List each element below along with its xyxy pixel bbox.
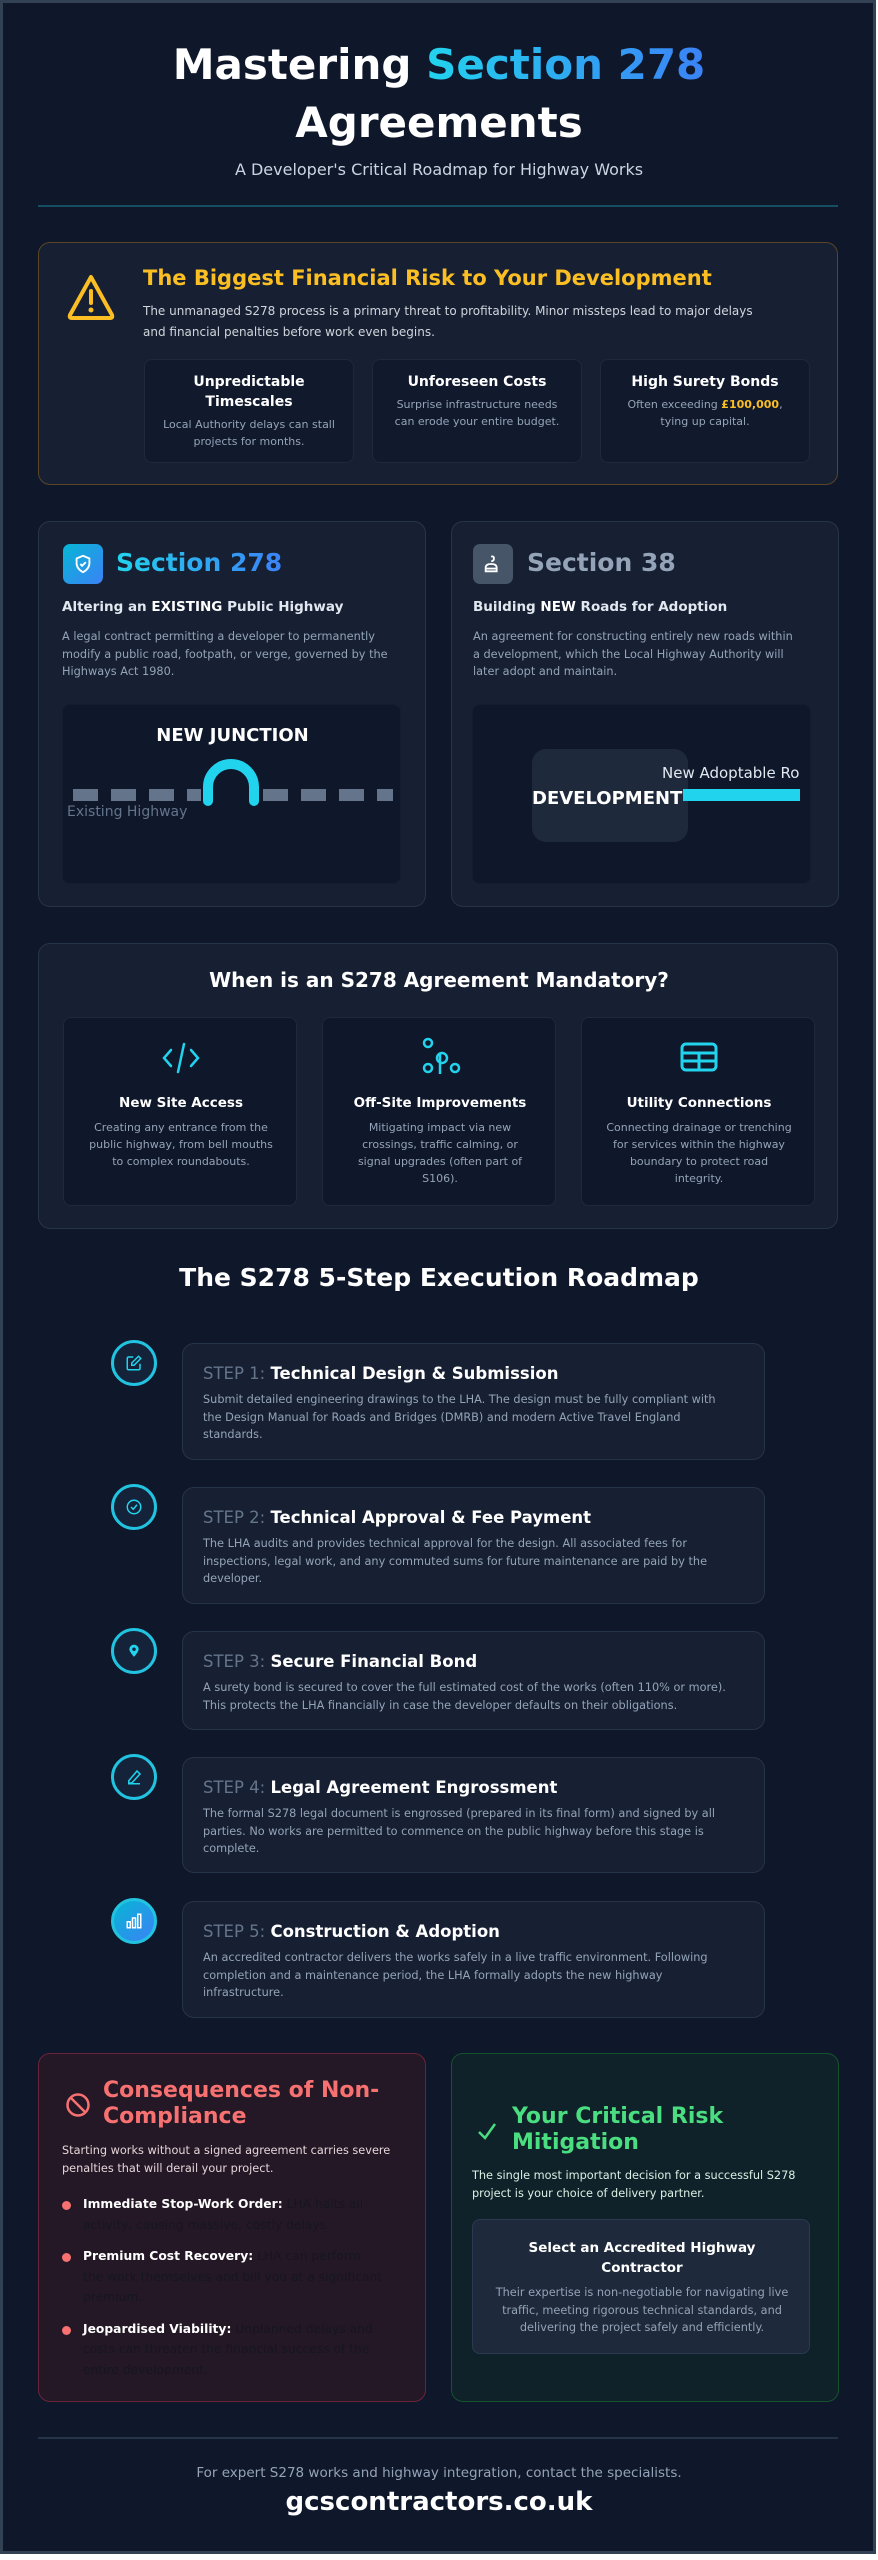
card: bonds: High Surety Bonds bbox=[631, 374, 779, 390]
callout: accredited contractor: Their expertise is non-negotiable for navigating live bbox=[496, 2286, 788, 2299]
text: STEP 1: Technical Design & Submission bbox=[203, 1364, 558, 1383]
title: Mastering Section 278 bbox=[173, 40, 705, 89]
text: standards. bbox=[203, 1428, 263, 1441]
bullet list bbox=[62, 2197, 382, 2376]
text: This protects the LHA financially in case the developer defaults on their obligations. bbox=[203, 1698, 677, 1712]
heading bbox=[512, 2104, 724, 2155]
card: off-site bbox=[322, 1017, 556, 1206]
bullet list: premium. bbox=[83, 2290, 142, 2304]
card: costs: Unforeseen Costs bbox=[408, 374, 546, 390]
bullet list: the work themselves and bill you at a significant bbox=[83, 2270, 382, 2284]
icon: pen bbox=[111, 1754, 157, 1800]
callout: accredited contractor: traffic, meeting rigorous technical standards, and bbox=[502, 2304, 782, 2316]
footer: gcscontractors.co.uk bbox=[286, 2487, 592, 2517]
text: An accredited contractor delivers the works safely in a live traffic environment. Following bbox=[203, 1951, 708, 1964]
card: bonds bbox=[600, 359, 810, 463]
text block: penalties that will derail your project. bbox=[62, 2162, 273, 2174]
text: Submit detailed engineering drawings to the LHA. The design must be fully compliant with bbox=[203, 1393, 716, 1406]
panel: consequences bbox=[38, 2053, 426, 2402]
subheading: Building NEW Roads for Adoption bbox=[473, 599, 727, 615]
card: timescales: Timescales bbox=[205, 394, 293, 410]
text: inspections, legal work, and any commuted sums for future maintenance are paid by the bbox=[203, 1554, 707, 1568]
card: costs: Surprise infrastructure needs bbox=[397, 398, 557, 411]
card: off-site: S106). bbox=[422, 1172, 458, 1185]
heading: Compliance bbox=[103, 2104, 246, 2129]
step 2 bbox=[111, 1484, 765, 1604]
diagram: new junction bbox=[62, 704, 401, 884]
heading: Mitigation bbox=[512, 2130, 639, 2155]
text: infrastructure. bbox=[203, 1986, 284, 1999]
panel: financial risk bbox=[38, 242, 838, 485]
text: the Design Manual for Roads and Bridges (DMRB) and modern Active Travel England bbox=[203, 1410, 681, 1424]
card: utility: integrity. bbox=[675, 1172, 723, 1185]
step 4 bbox=[111, 1754, 765, 1873]
bullet list: activity, causing massive, costly delays. bbox=[83, 2218, 330, 2232]
heading: When is an S278 Agreement Mandatory? bbox=[209, 968, 669, 992]
icon: person bbox=[473, 544, 513, 584]
icon: code bbox=[162, 1042, 200, 1074]
card: site access: to complex roundabouts. bbox=[112, 1155, 250, 1168]
text block: modify a public road, footpath, or verge, governed by the bbox=[62, 648, 388, 660]
heading: Consequences of Non- bbox=[103, 2078, 379, 2103]
card: bonds: Often exceeding £100,000, bbox=[627, 398, 783, 411]
step 5 bbox=[111, 1898, 765, 2018]
bullet list: costs can threaten the financial success of the bbox=[83, 2342, 369, 2356]
subheading: Altering an EXISTING Public Highway bbox=[62, 599, 343, 615]
panel: mitigation bbox=[451, 2053, 839, 2402]
icon: route bbox=[422, 1038, 460, 1074]
title bbox=[173, 40, 705, 147]
text: The LHA audits and provides technical approval for the design. All associated fees for bbox=[203, 1537, 687, 1550]
callout: accredited contractor: Contractor bbox=[601, 2260, 683, 2276]
card: site access: Creating any entrance from the bbox=[94, 1121, 268, 1134]
card: utility: for services within the highway bbox=[613, 1138, 785, 1151]
card: costs bbox=[372, 359, 582, 463]
icon: shield bbox=[63, 544, 103, 584]
bullet list: entire development. bbox=[83, 2362, 208, 2376]
footer bbox=[196, 2465, 682, 2517]
text block: The unmanaged S278 process is a primary threat to profitability. Minor missteps lead to major delays bbox=[143, 304, 753, 318]
heading: Section 38 bbox=[527, 548, 676, 577]
title: Agreements bbox=[295, 98, 583, 147]
text block: A legal contract permitting a developer to permanently bbox=[62, 630, 375, 643]
text block: The single most important decision for a successful S278 bbox=[472, 2169, 795, 2182]
text block bbox=[472, 2169, 795, 2200]
card: timescales: projects for months. bbox=[194, 435, 304, 448]
card: utility: boundary to protect road bbox=[630, 1155, 768, 1168]
panel: section 38 bbox=[451, 521, 839, 907]
heading: Your Critical Risk bbox=[512, 2104, 723, 2129]
text: The formal S278 legal document is engrossed (prepared in its final form) and signed by all bbox=[203, 1807, 715, 1820]
text block: later adopt and maintain. bbox=[473, 665, 617, 678]
diagram: new junction: NEW JUNCTION bbox=[156, 725, 309, 746]
icon: edit bbox=[111, 1340, 157, 1386]
text block bbox=[62, 2144, 390, 2174]
card: timescales: Unpredictable bbox=[193, 374, 305, 390]
text block bbox=[473, 630, 793, 678]
icon: check bbox=[478, 2123, 496, 2140]
heading: The Biggest Financial Risk to Your Development bbox=[143, 266, 712, 290]
card: off-site: signal upgrades (often part of bbox=[358, 1155, 522, 1168]
text: complete. bbox=[203, 1842, 259, 1855]
text: parties. No works are permitted to commence on the public highway before this stage is bbox=[203, 1824, 704, 1838]
diagram: development: DEVELOPMENT bbox=[532, 788, 682, 809]
icon: warning bbox=[68, 274, 114, 320]
card: site access bbox=[63, 1017, 297, 1206]
heading bbox=[103, 2078, 379, 2129]
subtitle: A Developer's Critical Roadmap for Highway Works bbox=[235, 160, 643, 179]
text block bbox=[62, 630, 388, 678]
card: utility: Utility Connections bbox=[627, 1095, 771, 1111]
callout: accredited contractor: Select an Accredited Highway bbox=[529, 2240, 755, 2256]
diagram: development bbox=[472, 704, 811, 884]
text block: project is your choice of delivery partner. bbox=[472, 2186, 704, 2200]
panel: mandatory bbox=[38, 943, 838, 1229]
icon: pin bbox=[111, 1628, 157, 1674]
text: completion and a maintenance period, the LHA formally adopts the new highway bbox=[203, 1968, 662, 1982]
callout: accredited contractor bbox=[472, 2219, 810, 2354]
text: STEP 5: Construction & Adoption bbox=[203, 1922, 500, 1941]
text: STEP 3: Secure Financial Bond bbox=[203, 1652, 477, 1671]
text: A surety bond is secured to cover the full estimated cost of the works (often 110% or more). bbox=[203, 1681, 726, 1694]
card: utility: Connecting drainage or trenching bbox=[606, 1121, 792, 1134]
text: developer. bbox=[203, 1572, 262, 1585]
step 1 bbox=[111, 1340, 765, 1460]
card: off-site: Off-Site Improvements bbox=[354, 1095, 526, 1111]
icon: table bbox=[680, 1042, 718, 1072]
text block: An agreement for constructing entirely new roads within bbox=[473, 630, 793, 643]
diagram: new junction: Existing Highway bbox=[67, 804, 187, 820]
icon: check bbox=[111, 1484, 157, 1530]
card: site access: New Site Access bbox=[119, 1095, 243, 1111]
text block: Highways Act 1980. bbox=[62, 665, 174, 678]
card: site access: public highway, from bell mouths bbox=[89, 1138, 273, 1151]
card: off-site: crossings, traffic calming, or bbox=[362, 1138, 518, 1151]
bullet list: Jeopardised Viability: Unplanned delays and bbox=[83, 2322, 373, 2336]
text block: a development, which the Local Highway Authority will bbox=[473, 648, 784, 660]
text block: Starting works without a signed agreement carries severe bbox=[62, 2144, 390, 2157]
text block: and financial penalties before work even begins. bbox=[143, 325, 435, 339]
text: STEP 2: Technical Approval & Fee Payment bbox=[203, 1508, 591, 1527]
callout: accredited contractor: delivering the project safely and efficiently. bbox=[520, 2321, 764, 2334]
icon: chart bbox=[111, 1898, 157, 1944]
card: costs: can erode your entire budget. bbox=[395, 415, 559, 428]
footer: For expert S278 works and highway integration, contact the specialists. bbox=[196, 2465, 682, 2481]
icon: prohibited bbox=[66, 2093, 90, 2117]
card: timescales: Local Authority delays can stall bbox=[163, 418, 335, 431]
card: bonds: tying up capital. bbox=[660, 415, 750, 428]
panel: section 278 bbox=[38, 521, 426, 907]
card: utility bbox=[581, 1017, 815, 1206]
card: timescales bbox=[144, 359, 354, 463]
card: off-site: Mitigating impact via new bbox=[369, 1121, 511, 1134]
bullet list: Immediate Stop-Work Order: LHA halts all bbox=[83, 2197, 363, 2211]
text: STEP 4: Legal Agreement Engrossment bbox=[203, 1778, 557, 1797]
heading: Section 278 bbox=[116, 548, 282, 577]
heading: roadmap: The S278 5-Step Execution Roadmap bbox=[179, 1263, 699, 1292]
bullet list: Premium Cost Recovery: LHA can perform bbox=[83, 2249, 361, 2263]
text block bbox=[142, 304, 753, 339]
step 3 bbox=[111, 1628, 765, 1730]
